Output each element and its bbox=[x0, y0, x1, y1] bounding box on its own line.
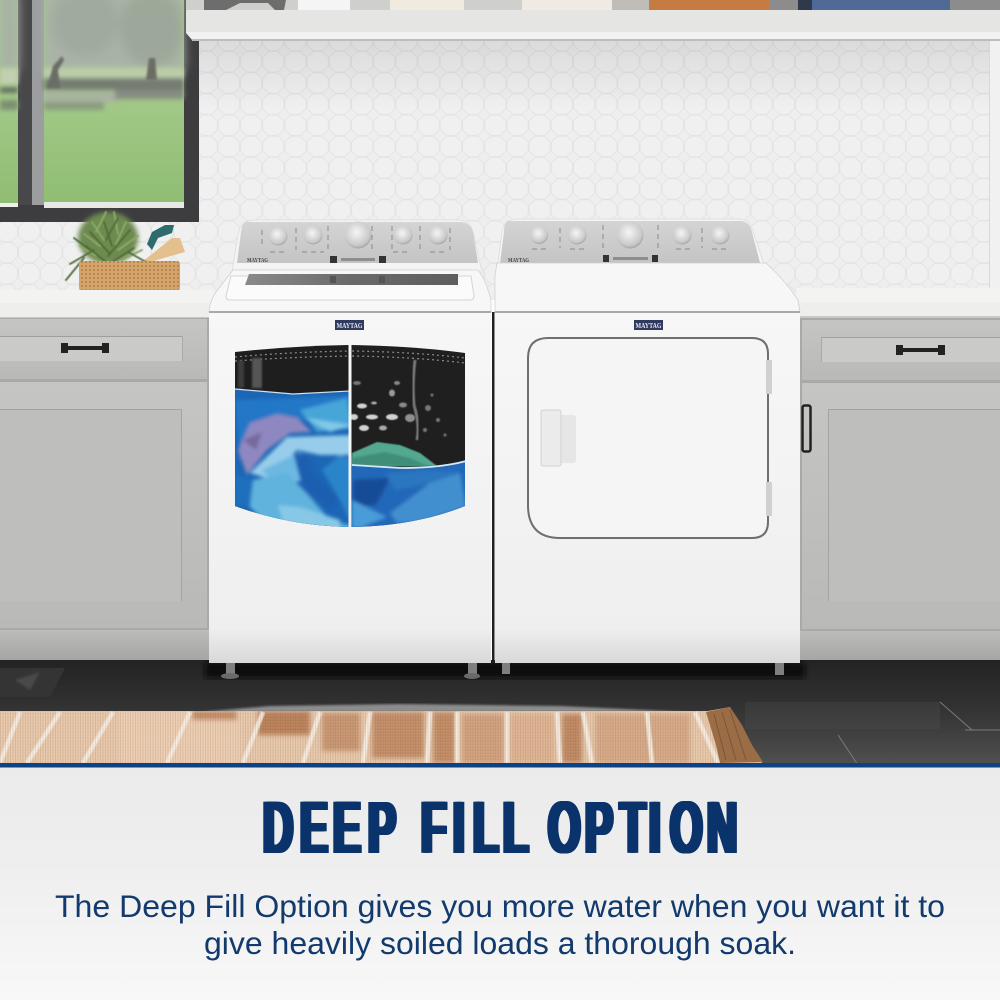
description: The Deep Fill Option gives you more water when you want it to bbox=[55, 888, 945, 924]
window bbox=[0, 0, 199, 222]
description bbox=[55, 888, 945, 961]
dryer badge: MAYTAG bbox=[636, 322, 662, 330]
rug pale stripes bbox=[0, 712, 718, 763]
dryer door bbox=[528, 338, 772, 538]
control labels bbox=[532, 225, 728, 252]
woven basket bbox=[79, 261, 180, 291]
teal spray bottle and brush bbox=[142, 225, 185, 262]
blue rule bbox=[0, 763, 1000, 768]
rug bbox=[0, 705, 770, 765]
wall shelf bbox=[186, 10, 1000, 41]
title: I bbox=[649, 786, 660, 869]
description: give heavily soiled loads a thorough soak. bbox=[204, 925, 796, 961]
floor bbox=[0, 660, 1000, 765]
title: L bbox=[473, 786, 498, 869]
trees seen through window bbox=[0, 0, 184, 70]
door handle bbox=[541, 410, 576, 466]
title: N bbox=[707, 786, 737, 869]
countertops bbox=[0, 288, 1000, 319]
cabinet drawer pull bbox=[61, 343, 109, 353]
rug fringe bbox=[706, 707, 763, 763]
plant in woven basket bbox=[66, 212, 185, 291]
plant foliage bbox=[66, 212, 146, 280]
right cabinets bbox=[798, 318, 1000, 662]
dryer top bbox=[495, 263, 800, 312]
title: T bbox=[620, 786, 645, 869]
left cabinets bbox=[0, 318, 210, 662]
washer bbox=[209, 220, 491, 679]
title: F bbox=[421, 786, 446, 869]
deep fill window: less water bbox=[352, 345, 465, 527]
title: D bbox=[263, 786, 293, 869]
cabinet drawer pull bbox=[896, 345, 945, 355]
washer feet bbox=[221, 662, 480, 679]
caption panel bbox=[0, 763, 1000, 1000]
washer control console bbox=[232, 220, 482, 272]
washer control console: MAYTAG bbox=[247, 258, 268, 264]
dryer control console: MAYTAG bbox=[508, 258, 529, 264]
washer badge bbox=[335, 320, 364, 330]
title: P bbox=[368, 786, 395, 869]
dryer body bbox=[495, 312, 800, 663]
washer badge: MAYTAG bbox=[336, 322, 363, 330]
title: O bbox=[548, 786, 580, 869]
control labels bbox=[262, 226, 450, 252]
title: L bbox=[503, 786, 528, 869]
title: E bbox=[333, 786, 360, 869]
title: O bbox=[670, 786, 702, 869]
dryer control console bbox=[497, 219, 766, 270]
divider between washer and dryer bbox=[492, 312, 494, 663]
items on top of wall shelf bbox=[186, 0, 1000, 12]
title: E bbox=[300, 786, 327, 869]
wall with octagon tile backsplash bbox=[0, 0, 1000, 300]
title: P bbox=[585, 786, 612, 869]
cabinet door pull bbox=[802, 406, 810, 452]
dryer feet bbox=[502, 662, 784, 675]
washer lid bbox=[209, 270, 491, 312]
dryer badge bbox=[634, 320, 663, 330]
dryer bbox=[495, 219, 800, 675]
title: I bbox=[453, 786, 464, 869]
washer body bbox=[209, 312, 491, 663]
rug dyed bands bbox=[191, 711, 692, 763]
deep fill window: more water bbox=[235, 345, 348, 527]
